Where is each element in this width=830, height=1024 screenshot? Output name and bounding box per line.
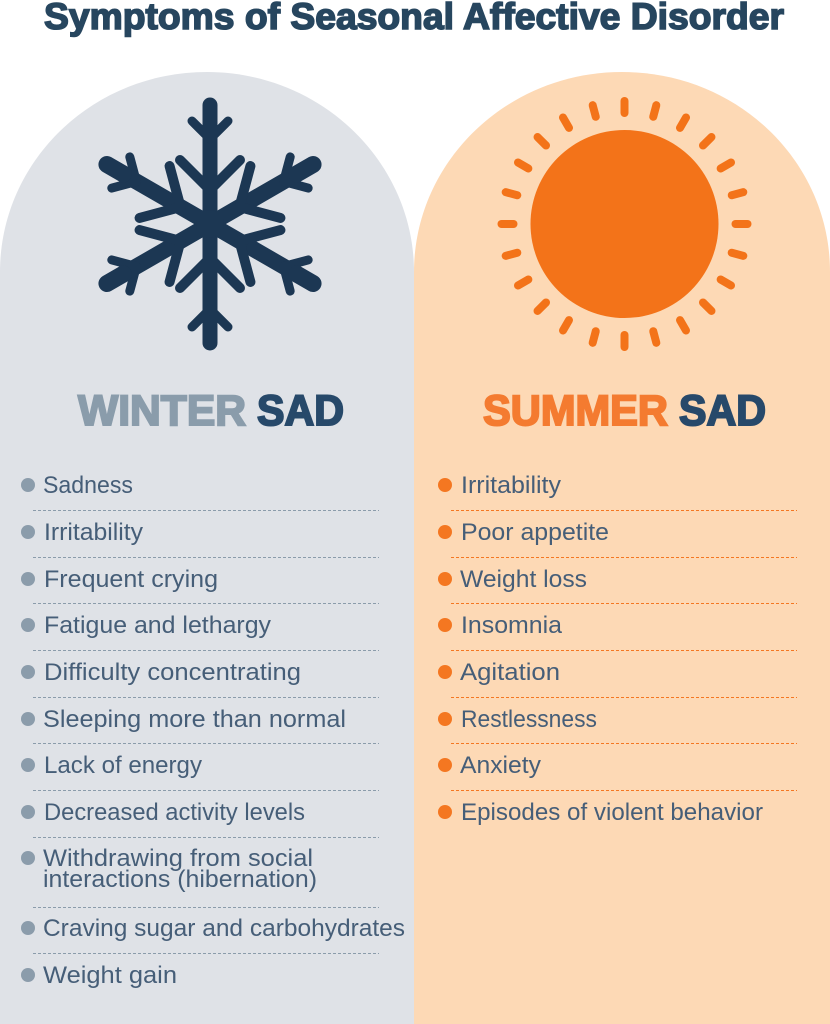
item: Restlessness: Restlessness (461, 706, 597, 733)
sun rays (502, 101, 748, 347)
item: Frequent crying: Frequent crying (44, 566, 218, 593)
item: Withdrawing from social interactions: interactions (hibernation) (43, 866, 317, 893)
item: Sleeping more than normal: Sleeping more than normal (43, 706, 346, 733)
item: Weight loss: Weight loss (460, 566, 587, 593)
item: Episodes of violent behavior: Episodes of violent behavior (461, 799, 763, 826)
item: Withdrawing from social interactions (21, 845, 317, 893)
item: Poor appetite: Poor appetite (461, 519, 609, 546)
sun disc (530, 130, 718, 318)
item: Agitation: Agitation (460, 659, 560, 686)
panel: summer SAD (414, 72, 830, 1024)
winter symptom list (21, 472, 405, 989)
item: Withdrawing from social interactions: Withdrawing from social (43, 845, 313, 872)
item: Insomnia: Insomnia (461, 612, 563, 639)
item: Weight gain: Weight gain (43, 962, 177, 989)
item: Irritability: Irritability (44, 519, 143, 546)
panel: winter SAD (0, 72, 414, 1024)
heading: winter SAD: WINTER (78, 387, 246, 435)
item: Decreased activity levels: Decreased activity levels (44, 799, 305, 826)
item: Irritability: Irritability (461, 472, 561, 499)
item: Craving sugar and carbohydrates: Craving sugar and carbohydrates (43, 915, 405, 942)
item: Fatigue and lethargy: Fatigue and lethargy (44, 612, 271, 639)
heading: summer SAD: SAD (679, 387, 766, 435)
heading: summer SAD (483, 387, 766, 435)
summer symptom list (438, 472, 797, 826)
heading: winter SAD (78, 387, 344, 435)
icon: sun (502, 101, 748, 347)
panel background: summer (414, 72, 830, 1024)
item: Sadness: Sadness (43, 472, 133, 499)
heading: summer SAD: SUMMER (483, 387, 668, 435)
item: Lack of energy: Lack of energy (44, 752, 202, 779)
icon: snowflake (92, 105, 328, 343)
item: Difficulty concentrating: Difficulty concentrating (44, 659, 301, 686)
item: Anxiety: Anxiety (460, 752, 541, 779)
panel background: winter (0, 72, 414, 1024)
heading: winter SAD: SAD (257, 387, 344, 435)
